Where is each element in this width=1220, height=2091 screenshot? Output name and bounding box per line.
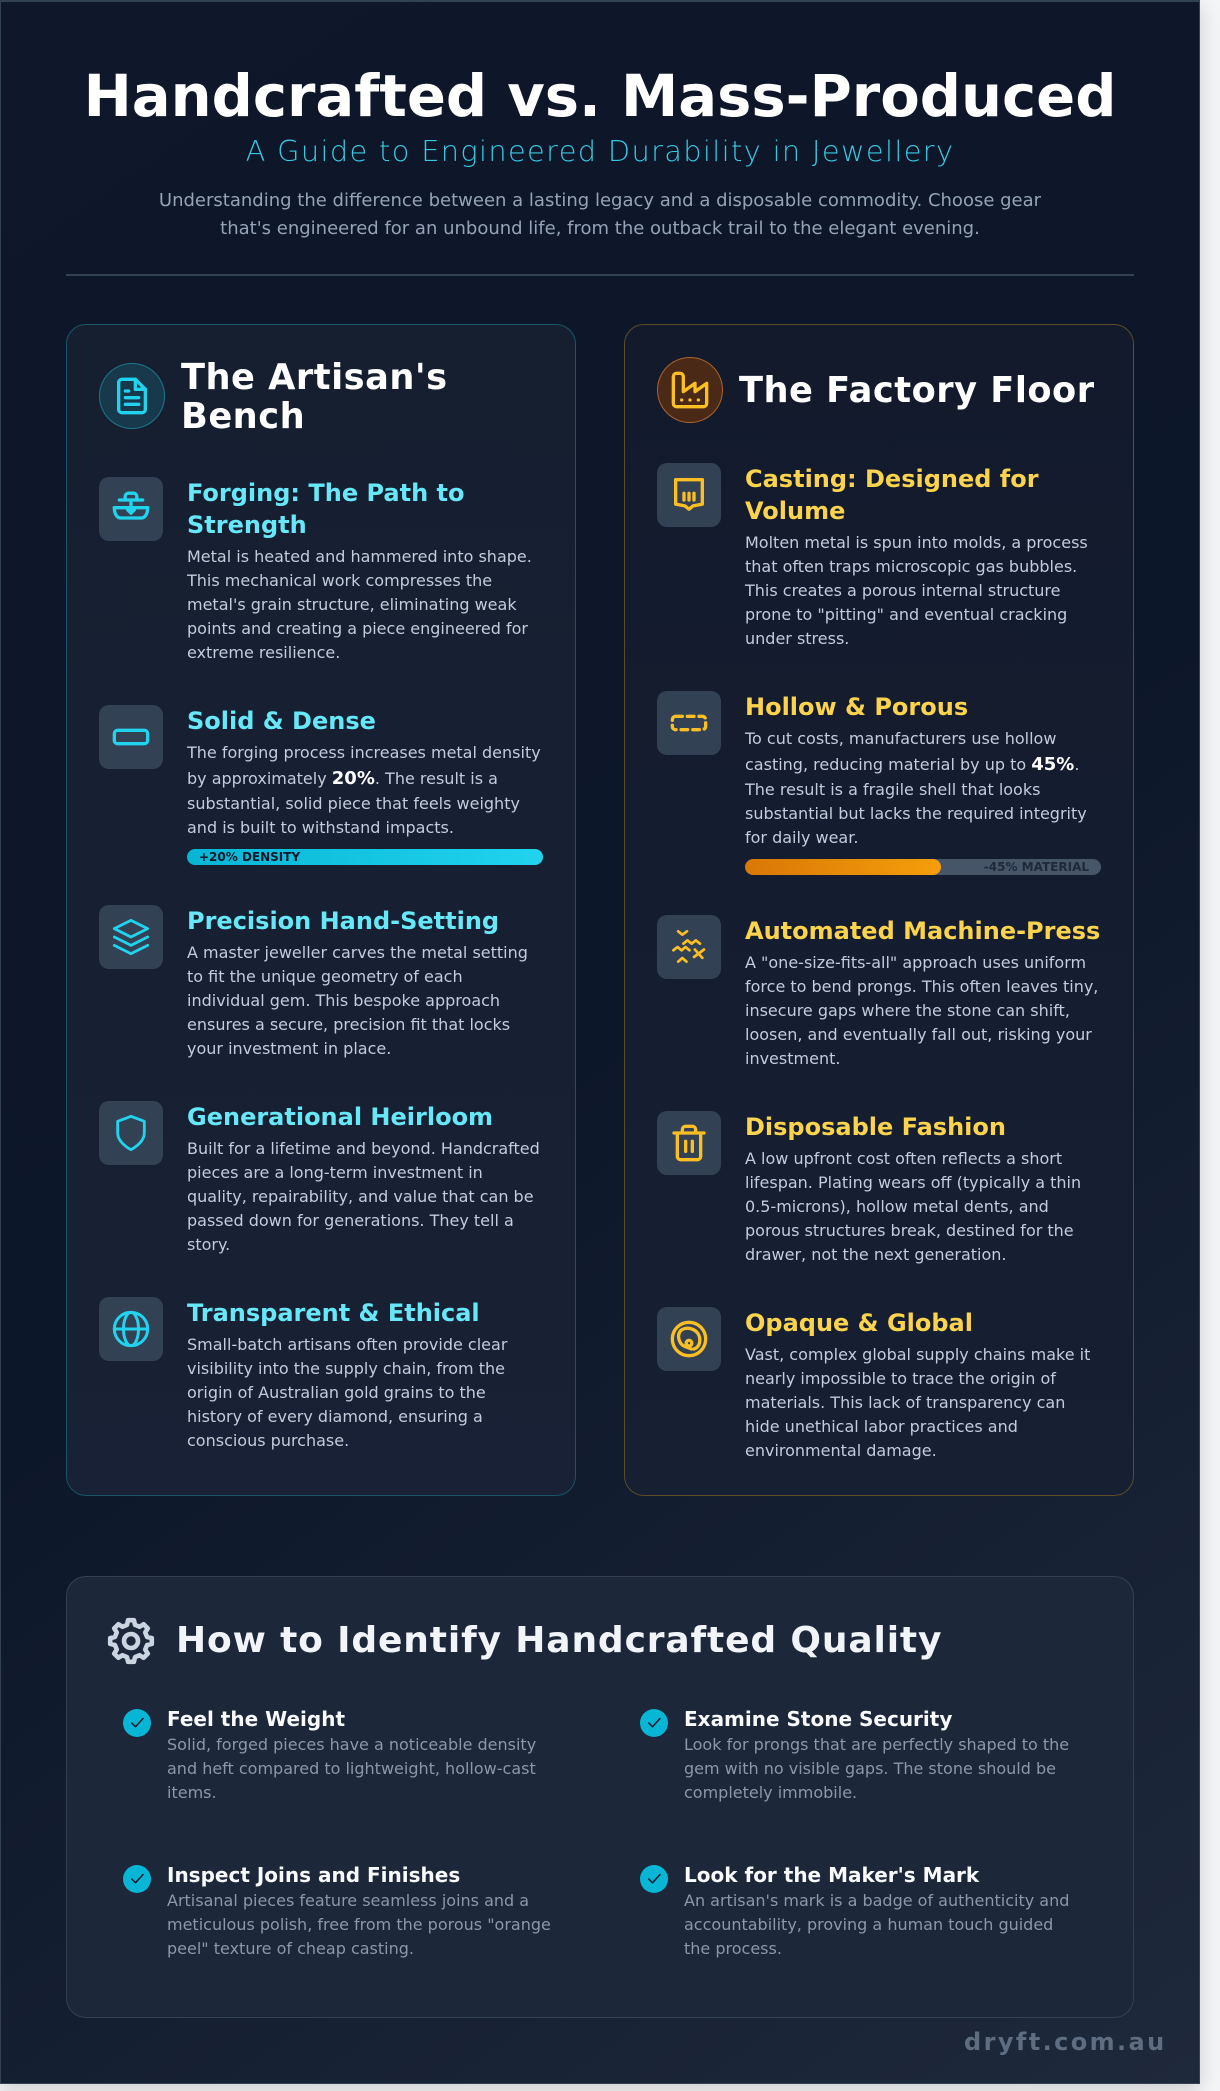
- text: solid and dense: by approximately 20%. The result is a: [187, 768, 498, 789]
- check icon: [640, 1709, 668, 1737]
- title: Handcrafted vs. Mass-Produced: [84, 63, 1116, 130]
- tip text: meticulous polish, free from the porous "orange: [167, 1915, 551, 1934]
- text: solid and dense: Solid & Dense: [187, 707, 376, 735]
- text: forging: Forging: The Path to: [187, 479, 464, 507]
- tip text: [684, 1891, 1069, 1958]
- text: disposable fashion: lifespan. Plating wears off (typically a thin: [745, 1173, 1081, 1192]
- check icon: [640, 1865, 668, 1893]
- text: hollow and porous: substantial but lacks the required integrity: [745, 804, 1087, 823]
- text: opaque and global: [745, 1309, 1090, 1460]
- text: opaque and global: Vast, complex global supply chains make it: [745, 1345, 1090, 1364]
- text: transparent and ethical: Transparent & Ethical: [187, 1299, 480, 1327]
- icon: machine press: [657, 915, 721, 979]
- item: generational heirloom: [99, 1101, 540, 1254]
- text: forging: This mechanical work compresses the: [187, 571, 492, 590]
- item: casting: [657, 463, 1088, 648]
- tip text: gem with no visible gaps. The stone should be: [684, 1759, 1056, 1778]
- icon: casting mold: [657, 463, 721, 527]
- intro text: that's engineered for an unbound life, from the outback trail to the elegant evening.: [220, 218, 980, 239]
- text: casting: under stress.: [745, 629, 849, 648]
- text: hollow and porous: for daily wear.: [745, 828, 858, 847]
- tip text: and heft compared to lightweight, hollow-cast: [167, 1759, 536, 1778]
- icon: globe: [99, 1297, 163, 1361]
- text: disposable fashion: drawer, not the next generation.: [745, 1245, 1006, 1264]
- text: opaque and global: environmental damage.: [745, 1441, 937, 1460]
- tip text: [684, 1735, 1069, 1802]
- text: generational heirloom: Generational Heirloom: [187, 1103, 493, 1131]
- text: forging: metal's grain structure, eliminating weak: [187, 595, 517, 614]
- text: generational heirloom: quality, repairability, and value that can be: [187, 1187, 534, 1206]
- item: forging: [99, 477, 532, 662]
- text: casting: Casting: Designed for: [745, 465, 1039, 493]
- text: transparent and ethical: conscious purchase.: [187, 1431, 349, 1450]
- text: solid and dense: and is built to withstand impacts.: [187, 818, 454, 837]
- icon: gear: [108, 1618, 154, 1664]
- text: transparent and ethical: history of every diamond, ensuring a: [187, 1407, 483, 1426]
- text: precision hand-setting: to fit the unique geometry of each: [187, 967, 463, 986]
- tip text: Artisanal pieces feature seamless joins and a: [167, 1891, 529, 1910]
- tip title: Look for the Maker's Mark: [684, 1863, 979, 1887]
- text: precision hand-setting: individual gem. This bespoke approach: [187, 991, 500, 1010]
- icon: layers: [99, 905, 163, 969]
- tip text: peel" texture of cheap casting.: [167, 1939, 414, 1958]
- icon: solid bar: [99, 705, 163, 769]
- text: precision hand-setting: ensures a secure, precision fit that locks: [187, 1015, 510, 1034]
- text: opaque and global: Opaque & Global: [745, 1309, 973, 1337]
- text: disposable fashion: porous structures break, destined for the: [745, 1221, 1074, 1240]
- text: precision hand-setting: [187, 907, 528, 1058]
- text: forging: extreme resilience.: [187, 643, 340, 662]
- text: solid and dense: The forging process increases metal density: [187, 743, 541, 762]
- footer brand: dryft.com.au: [964, 2028, 1167, 2056]
- item: precision hand-setting: [99, 905, 528, 1058]
- text: casting: This creates a porous internal structure: [745, 581, 1060, 600]
- text: disposable fashion: 0.5-microns), hollow metal dents, and: [745, 1197, 1049, 1216]
- item: opaque and global: [657, 1307, 1090, 1460]
- tip: look for the maker's mark: [640, 1863, 1069, 1958]
- tip title: Examine Stone Security: [684, 1707, 952, 1731]
- tip text: completely immobile.: [684, 1783, 857, 1802]
- text: solid and dense: substantial, solid piece that feels weighty: [187, 794, 520, 813]
- tip: inspect joins and finishes: [123, 1863, 551, 1958]
- tip text: [167, 1891, 551, 1958]
- text: precision hand-setting: A master jeweller carves the metal setting: [187, 943, 528, 962]
- text: disposable fashion: A low upfront cost often reflects a short: [745, 1149, 1062, 1168]
- text: precision hand-setting: your investment in place.: [187, 1039, 391, 1058]
- item: solid and dense: [99, 705, 543, 865]
- text: solid and dense: [186, 707, 543, 865]
- text: generational heirloom: pieces are a long-term investment in: [187, 1163, 483, 1182]
- text: hollow and porous: Hollow & Porous: [745, 693, 968, 721]
- text: transparent and ethical: [187, 1299, 508, 1450]
- text: casting: prone to "pitting" and eventual cracking: [745, 605, 1067, 624]
- text: opaque and global: nearly impossible to trace the origin of: [745, 1369, 1056, 1388]
- density bar: +20% DENSITY: [199, 850, 300, 864]
- panel heading: The Factory Floor: [739, 370, 1095, 411]
- item: hollow and porous: [657, 691, 1101, 875]
- material bar: -45% MATERIAL: [984, 860, 1089, 874]
- icon: factory: [657, 357, 723, 423]
- panel: the artisan's bench: [66, 324, 576, 1496]
- tip text: Look for prongs that are perfectly shaped to the: [684, 1735, 1069, 1754]
- subtitle: A Guide to Engineered Durability in Jewellery: [246, 134, 954, 168]
- text: hollow and porous: The result is a fragile shell that looks: [745, 780, 1040, 799]
- text: casting: that often traps microscopic gas bubbles.: [745, 557, 1077, 576]
- panel: the factory floor: [624, 324, 1134, 1496]
- icon: shield: [99, 1101, 163, 1165]
- text: automated machine-press: investment.: [745, 1049, 840, 1068]
- text: casting: Volume: [745, 497, 845, 525]
- text: automated machine-press: [745, 917, 1100, 1068]
- text: precision hand-setting: Precision Hand-Setting: [187, 907, 499, 935]
- tip text: the process.: [684, 1939, 782, 1958]
- text: opaque and global: materials. This lack of transparency can: [745, 1393, 1065, 1412]
- item: transparent and ethical: [99, 1297, 508, 1450]
- tip title: Feel the Weight: [167, 1707, 345, 1731]
- tip text: accountability, proving a human touch guided: [684, 1915, 1053, 1934]
- text: automated machine-press: force to bend prongs. This often leaves tiny,: [745, 977, 1098, 996]
- text: transparent and ethical: origin of Australian gold grains to the: [187, 1383, 486, 1402]
- text: transparent and ethical: Small-batch artisans often provide clear: [187, 1335, 507, 1354]
- text: generational heirloom: [187, 1103, 540, 1254]
- text: casting: Molten metal is spun into molds, a process: [745, 533, 1088, 552]
- tip: feel the weight: [123, 1707, 536, 1802]
- density bar: [187, 849, 543, 865]
- text: forging: points and creating a piece engineered for: [187, 619, 528, 638]
- text: generational heirloom: passed down for generations. They tell a: [187, 1211, 514, 1230]
- item: automated machine-press: [657, 915, 1100, 1068]
- text: opaque and global: hide unethical labor practices and: [745, 1417, 1018, 1436]
- check icon: [123, 1865, 151, 1893]
- text: automated machine-press: loosen, and eventually fall out, risking your: [745, 1025, 1092, 1044]
- text: disposable fashion: Disposable Fashion: [745, 1113, 1006, 1141]
- tip text: Solid, forged pieces have a noticeable density: [167, 1735, 536, 1754]
- panel heading: Bench: [181, 396, 305, 437]
- icon: forging: [99, 477, 163, 541]
- text: forging: Metal is heated and hammered into shape.: [187, 547, 532, 566]
- tip text: An artisan's mark is a badge of authenticity and: [684, 1891, 1069, 1910]
- item: disposable fashion: [657, 1111, 1081, 1264]
- text: disposable fashion: [745, 1113, 1081, 1264]
- intro text: [159, 190, 1041, 239]
- panel heading: The Artisan's: [181, 357, 448, 398]
- tip title: Inspect Joins and Finishes: [167, 1863, 460, 1887]
- text: hollow and porous: To cut costs, manufacturers use hollow: [745, 729, 1056, 748]
- text: casting: [744, 465, 1088, 648]
- text: forging: [186, 479, 532, 662]
- intro text: Understanding the difference between a lasting legacy and a disposable commodity. Choose gear: [159, 190, 1041, 211]
- material bar: [745, 859, 1101, 875]
- text: automated machine-press: insecure gaps where the stone can shift,: [745, 1001, 1070, 1020]
- text: forging: Strength: [187, 511, 307, 539]
- tip: examine stone security: [640, 1707, 1069, 1802]
- section heading: How to Identify Handcrafted Quality: [176, 1620, 942, 1661]
- tip text: [167, 1735, 536, 1802]
- text: transparent and ethical: visibility into the supply chain, from the: [187, 1359, 505, 1378]
- panel heading: [181, 357, 448, 437]
- text: automated machine-press: Automated Machine-Press: [745, 917, 1100, 945]
- icon: document: [99, 363, 165, 429]
- panel: how to identify handcrafted quality: [66, 1576, 1134, 2018]
- icon: tangled globe: [657, 1307, 721, 1371]
- text: generational heirloom: Built for a lifetime and beyond. Handcrafted: [187, 1139, 540, 1158]
- text: hollow and porous: [744, 693, 1101, 875]
- text: automated machine-press: A "one-size-fits-all" approach uses uniform: [745, 953, 1086, 972]
- text: generational heirloom: story.: [187, 1235, 230, 1254]
- icon: hollow bar: [657, 691, 721, 755]
- check icon: [123, 1709, 151, 1737]
- text: hollow and porous: casting, reducing material by up to 45%.: [745, 754, 1079, 775]
- icon: trash can: [657, 1111, 721, 1175]
- tip text: items.: [167, 1783, 217, 1802]
